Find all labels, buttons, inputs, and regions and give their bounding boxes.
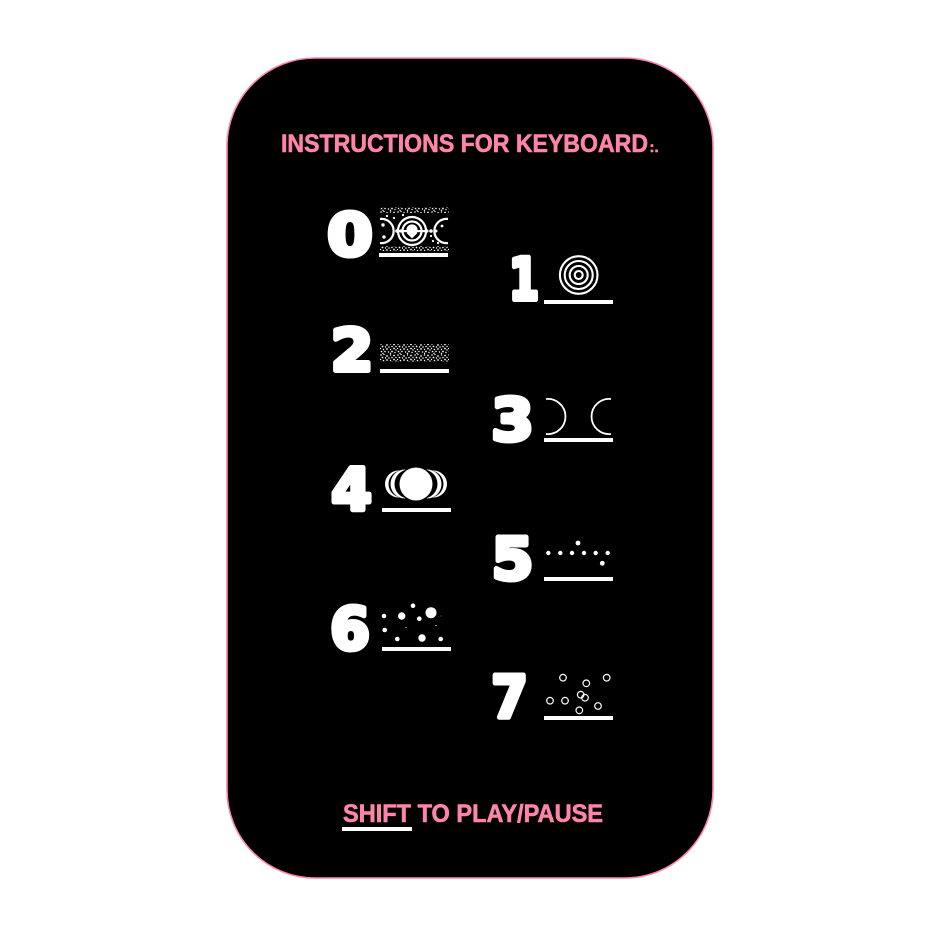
icon: scattered dots [382, 603, 443, 642]
baseline [544, 716, 613, 720]
digit 7: 7 [491, 665, 528, 732]
icon: speckle band [380, 344, 449, 362]
baseline [544, 577, 613, 581]
key 4: overlapping spheres [331, 456, 451, 524]
panel: keyboard instructions card [227, 58, 713, 878]
icon: row of dots [546, 541, 610, 566]
key 6: scattered dots [330, 595, 451, 663]
key 5: small dots [492, 525, 613, 593]
key 1: concentric circles [509, 246, 613, 314]
key 2: speckle band [331, 318, 449, 385]
digit 1: 1 [509, 246, 539, 314]
digit 4: 4 [331, 456, 372, 524]
digit 2: 2 [331, 318, 373, 385]
key 7: rings [491, 665, 613, 732]
baseline [379, 253, 448, 257]
key 3: crescents [491, 387, 613, 455]
baseline [544, 300, 613, 304]
digit 5: 5 [492, 525, 533, 593]
icon: concentric rings [560, 256, 598, 294]
baseline [382, 647, 451, 651]
footer: shift to play/pause: SHIFT TO PLAY/PAUSE [343, 800, 603, 828]
digit 3: 3 [491, 387, 534, 455]
baseline [382, 508, 451, 512]
key 0: all layers [327, 201, 449, 269]
digit 6: 6 [330, 595, 370, 663]
icon: facing arcs [546, 399, 611, 434]
baseline [544, 438, 613, 442]
title: INSTRUCTIONS FOR KEYBOARD [281, 130, 648, 158]
icon: scattered rings [547, 674, 610, 714]
icon: overlapping spheres [385, 466, 447, 502]
title: :. [650, 139, 659, 156]
icon: all layers combined [380, 207, 449, 251]
digit 0: 0 [327, 201, 373, 269]
baseline [380, 369, 449, 373]
